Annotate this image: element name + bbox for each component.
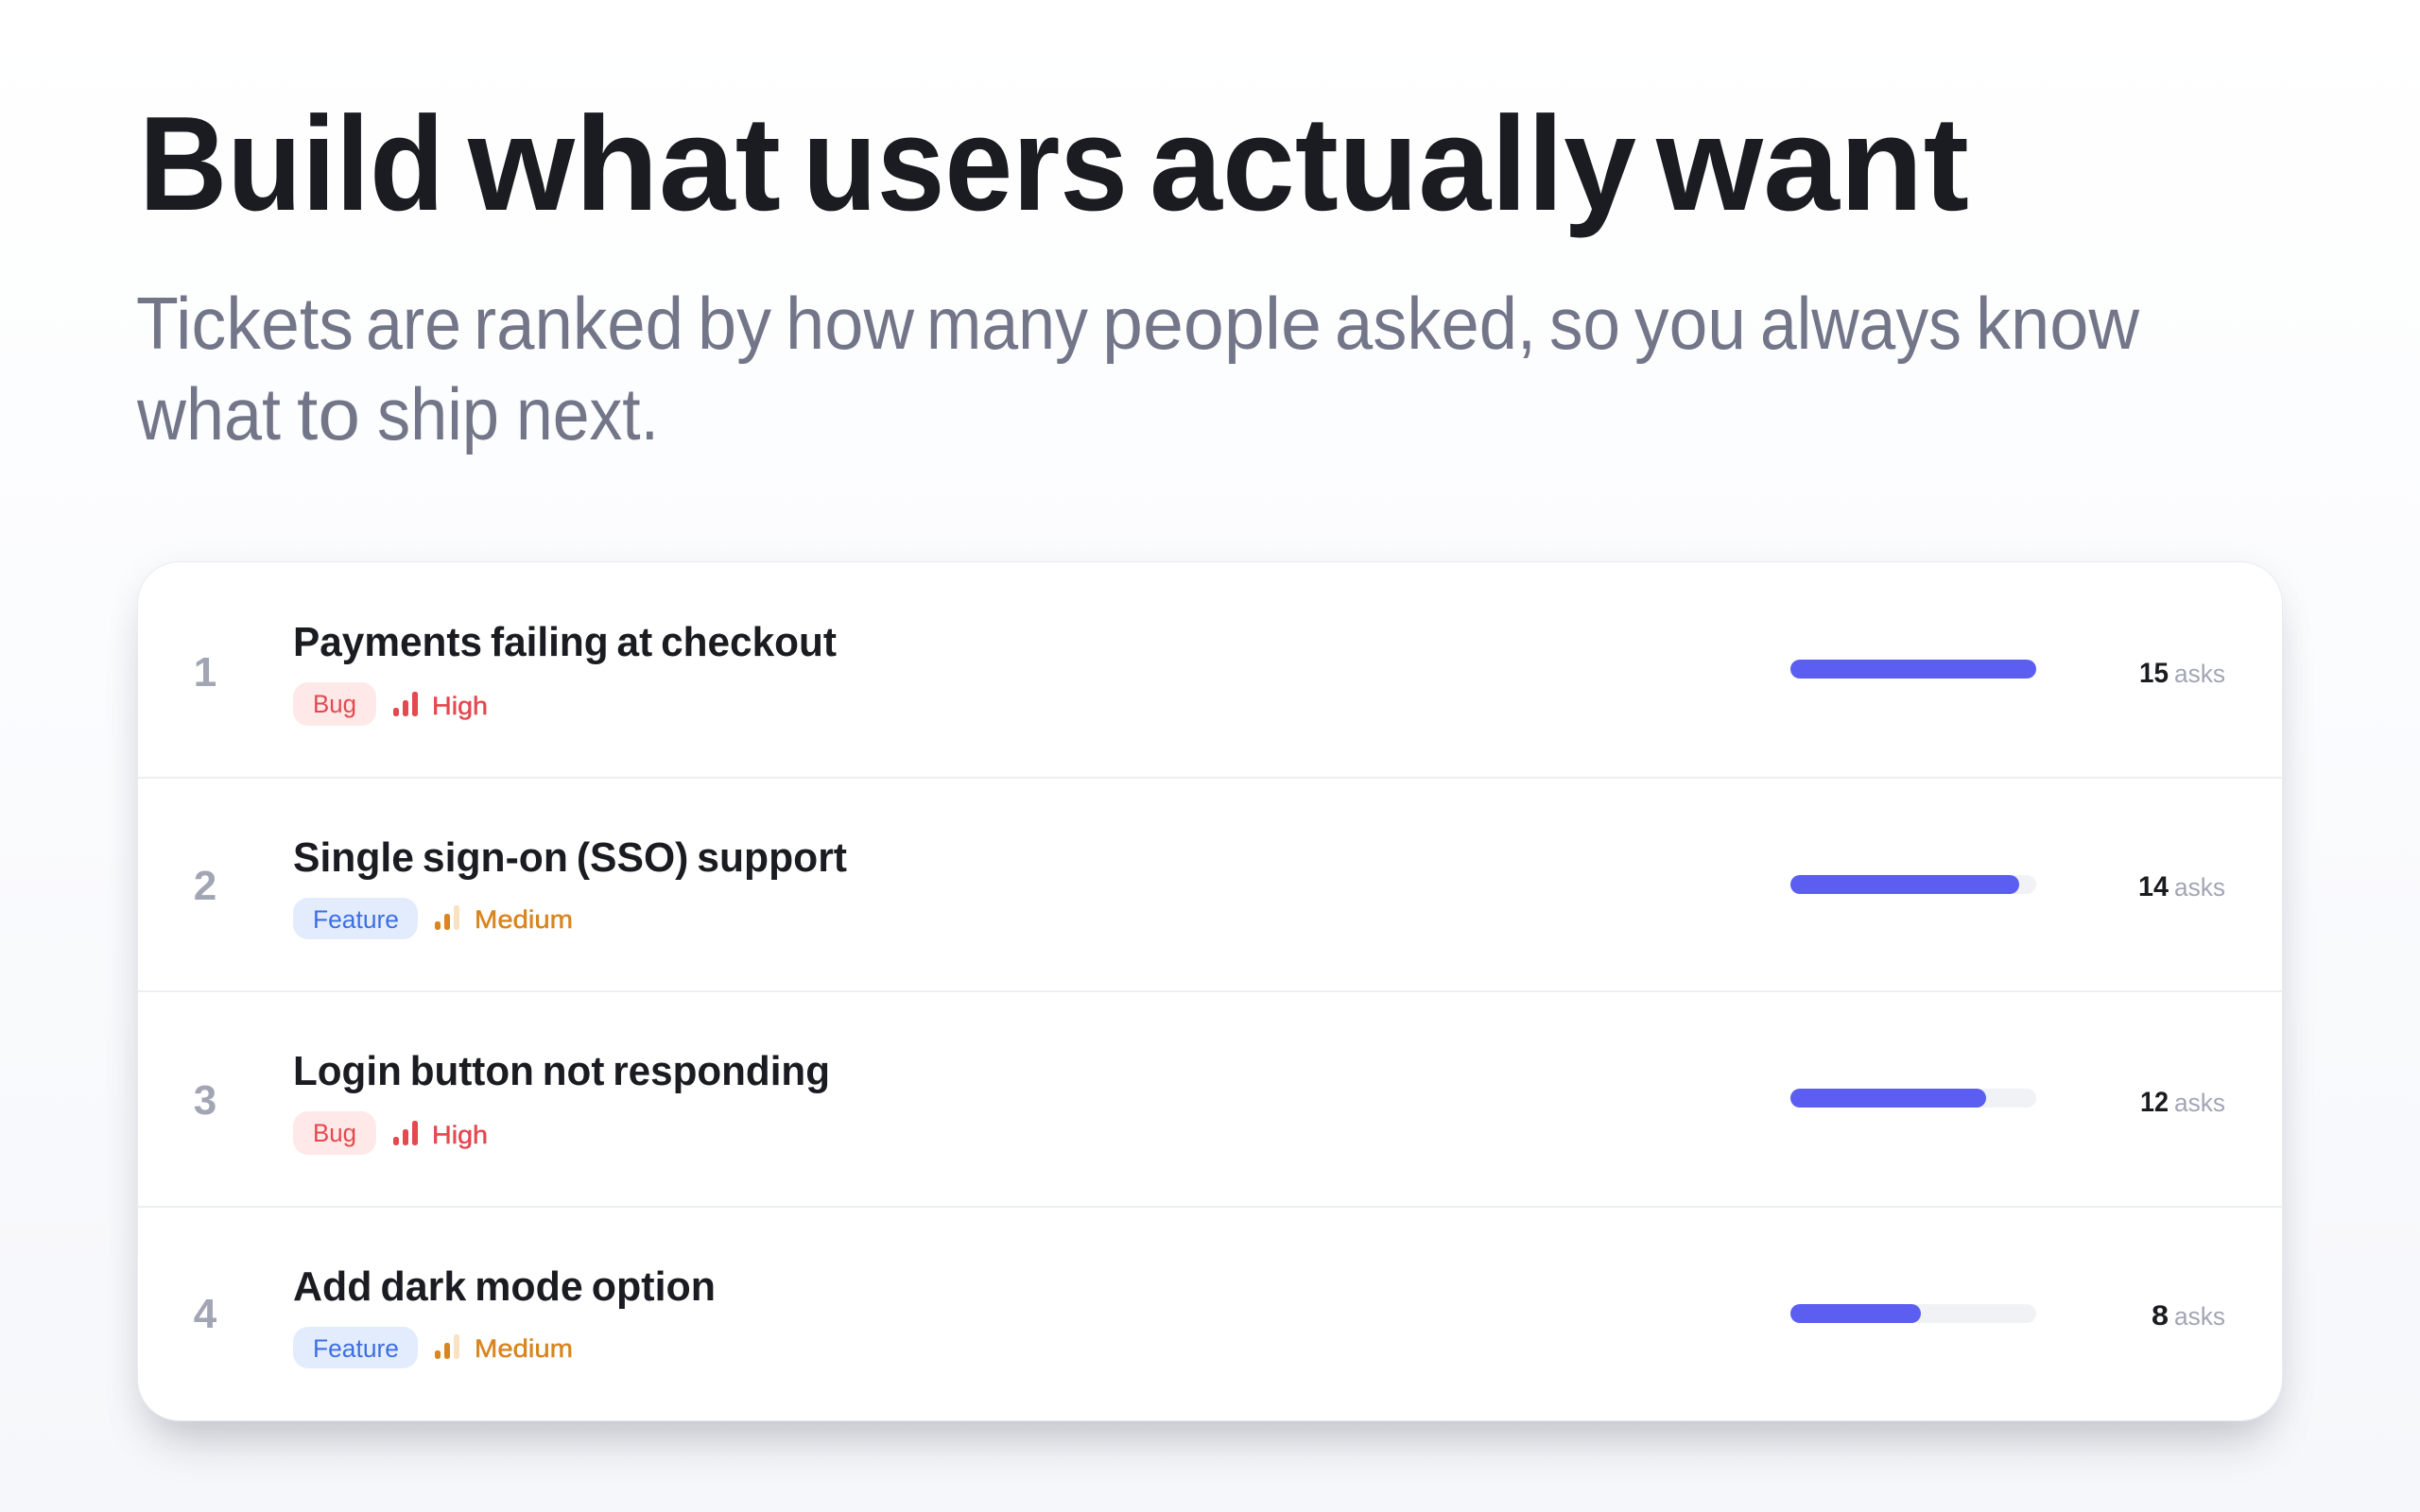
subtitle: by — [698, 282, 771, 365]
rank 4: 4 — [194, 1291, 217, 1337]
priority label: Medium — [475, 1334, 573, 1363]
subtitle: always — [1760, 282, 1962, 365]
ask count — [2140, 1087, 2225, 1118]
title: users — [803, 89, 1128, 239]
tag: Feature — [293, 898, 418, 939]
subtitle: what — [136, 372, 281, 455]
tag: Bug — [293, 682, 376, 726]
progress bar — [1790, 1089, 2036, 1108]
ask count: asks — [2174, 1089, 2225, 1117]
subtitle: know — [1976, 282, 2140, 365]
tag: Feature: Feature — [313, 905, 399, 934]
ask count — [2138, 871, 2225, 902]
tag: Feature — [293, 1327, 418, 1368]
subtitle: ship — [377, 372, 499, 455]
header — [136, 89, 2140, 455]
subtitle — [136, 282, 2140, 455]
title: want — [1655, 89, 1969, 239]
row 4 — [194, 1263, 2225, 1368]
subtitle: many — [926, 282, 1088, 365]
title: what — [467, 89, 781, 239]
ask count: asks — [2174, 873, 2225, 902]
panel: ticket list — [138, 562, 2282, 1420]
ask count: 15 — [2139, 658, 2169, 689]
row 1 — [194, 619, 2225, 726]
subtitle: people — [1102, 282, 1322, 365]
ticket title: Login button not responding — [293, 1048, 830, 1094]
row 3 — [194, 1048, 2225, 1155]
subtitle: ranked — [474, 282, 683, 365]
tag: Bug — [293, 1111, 376, 1155]
row 2 — [194, 834, 2225, 939]
subtitle: Tickets — [136, 282, 354, 365]
subtitle: how — [786, 282, 915, 365]
ticket title: Add dark mode option — [293, 1263, 716, 1310]
priority label: High — [432, 692, 488, 720]
tag: Bug: Bug — [313, 1119, 356, 1147]
ticket title: Payments failing at checkout — [293, 619, 837, 665]
title: Build — [139, 89, 444, 239]
subtitle: are — [366, 282, 461, 365]
ask count — [2152, 1300, 2225, 1332]
subtitle: you — [1634, 282, 1746, 365]
ask count: 8 — [2152, 1300, 2169, 1332]
ticket title: Single sign-on (SSO) support — [293, 834, 847, 881]
tag: Bug: Bug — [313, 690, 356, 718]
subtitle: asked, — [1335, 282, 1536, 365]
ask count: 12 — [2140, 1087, 2169, 1118]
title: actually — [1150, 89, 1636, 239]
rank 3: 3 — [194, 1077, 216, 1124]
ask count: asks — [2174, 660, 2225, 688]
progress bar — [1790, 660, 2036, 679]
ask count — [2139, 658, 2225, 689]
icon: high priority bars — [393, 1121, 418, 1145]
progress bar — [1790, 875, 2036, 894]
subtitle: so — [1549, 282, 1620, 365]
rank 1: 1 — [194, 649, 216, 696]
subtitle: to — [297, 372, 360, 455]
subtitle: next. — [516, 372, 659, 455]
ask count: 14 — [2138, 871, 2169, 902]
ask count: asks — [2174, 1302, 2225, 1331]
priority label: High — [432, 1121, 488, 1149]
tag: Feature: Feature — [313, 1334, 399, 1363]
priority label: Medium — [475, 905, 573, 934]
icon: medium priority bars — [435, 1334, 459, 1359]
progress bar — [1790, 1304, 2036, 1323]
icon: high priority bars — [393, 692, 418, 716]
icon: medium priority bars — [435, 905, 459, 930]
rank 2: 2 — [194, 863, 216, 909]
